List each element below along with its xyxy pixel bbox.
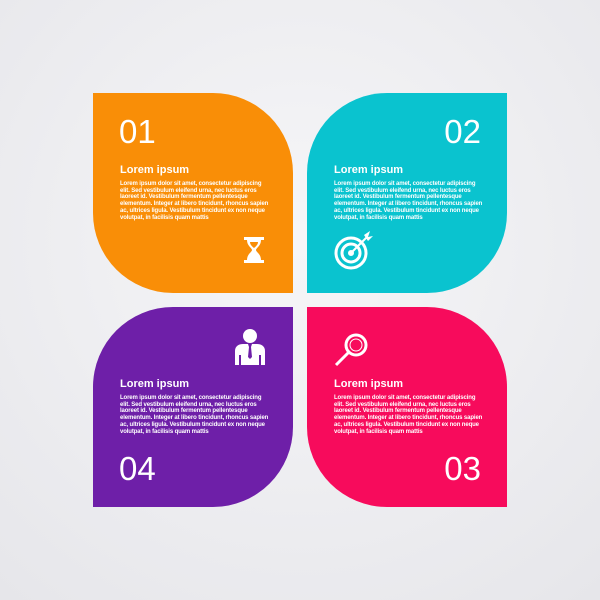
body text: laoreet id. Vestibulum fermentum pellentesque <box>120 408 248 414</box>
body text: laoreet id. Vestibulum fermentum pellentesque <box>334 194 462 200</box>
body text: Lorem ipsum dolor sit amet, consectetur adipiscing <box>334 395 475 401</box>
body text: volutpat, in facilisis quam mattis <box>120 429 209 435</box>
body text: elementum. Integer at libero tincidunt, rhoncus sapien <box>120 201 268 207</box>
heading: Lorem ipsum <box>334 164 403 176</box>
body text: elit. Sed vestibulum eleifend urna, nec luctus eros <box>334 188 471 194</box>
body text: Lorem ipsum dolor sit amet, consectetur adipiscing <box>334 181 475 187</box>
heading: Lorem ipsum <box>120 164 189 176</box>
body text: volutpat, in facilisis quam mattis <box>334 215 423 221</box>
body text: laoreet id. Vestibulum fermentum pellentesque <box>120 194 248 200</box>
body text: volutpat, in facilisis quam mattis <box>334 429 423 435</box>
body text: ac, ultrices ligula. Vestibulum tincidunt ex non neque <box>334 422 479 428</box>
number 01: 01 <box>119 113 156 150</box>
body text: volutpat, in facilisis quam mattis <box>120 215 209 221</box>
body text: elementum. Integer at libero tincidunt, rhoncus sapien <box>334 201 482 207</box>
body text: Lorem ipsum dolor sit amet, consectetur adipiscing <box>120 395 261 401</box>
body text: Lorem ipsum dolor sit amet, consectetur adipiscing <box>120 181 261 187</box>
panel: 01 <box>93 93 293 293</box>
number 04: 04 <box>119 450 156 487</box>
body text: elementum. Integer at libero tincidunt, rhoncus sapien <box>334 415 482 421</box>
body text: elit. Sed vestibulum eleifend urna, nec luctus eros <box>120 188 257 194</box>
body text <box>120 394 268 435</box>
heading: Lorem ipsum <box>334 378 403 390</box>
body text: ac, ultrices ligula. Vestibulum tincidunt ex non neque <box>120 208 265 214</box>
body text: laoreet id. Vestibulum fermentum pellentesque <box>334 408 462 414</box>
number 03: 03 <box>444 450 481 487</box>
panel: 04 <box>93 307 293 507</box>
icon: hourglass <box>244 237 264 263</box>
body text: elit. Sed vestibulum eleifend urna, nec luctus eros <box>334 402 471 408</box>
panel: 03 <box>307 307 507 507</box>
number 02: 02 <box>444 113 481 150</box>
body text: ac, ultrices ligula. Vestibulum tincidunt ex non neque <box>334 208 479 214</box>
icon: target <box>334 231 373 270</box>
heading: Lorem ipsum <box>120 378 189 390</box>
body text <box>120 180 268 221</box>
panel: 02 <box>307 93 507 293</box>
body text: elementum. Integer at libero tincidunt, rhoncus sapien <box>120 415 268 421</box>
icon: magnifier <box>335 334 368 366</box>
body text: elit. Sed vestibulum eleifend urna, nec luctus eros <box>120 402 257 408</box>
icon: businessman <box>235 329 265 365</box>
body text <box>334 394 482 435</box>
body text: ac, ultrices ligula. Vestibulum tincidunt ex non neque <box>120 422 265 428</box>
body text <box>334 180 482 221</box>
